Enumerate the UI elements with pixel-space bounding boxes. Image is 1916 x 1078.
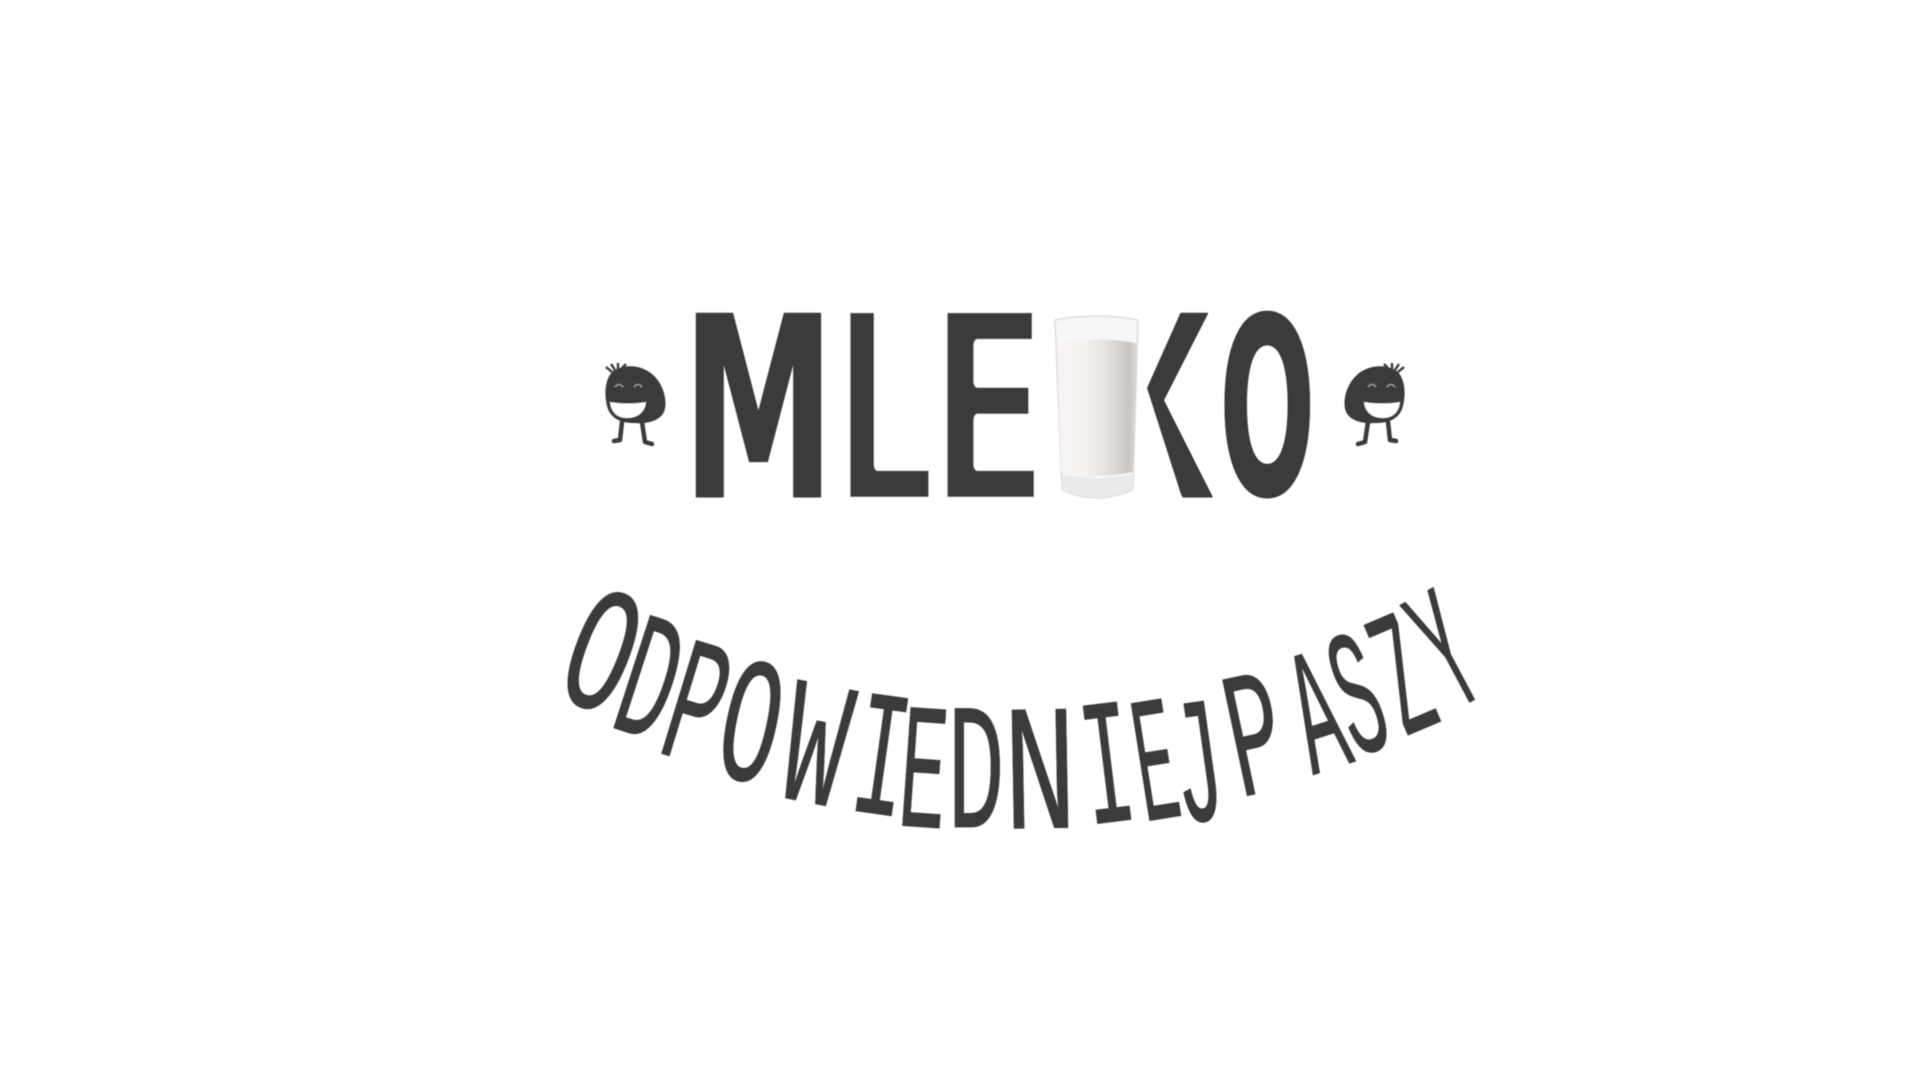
- title word: MLEKO: M: [682, 264, 835, 557]
- curved tagline: ODPOWIEDNIEJ PASZY: D: [590, 584, 704, 794]
- curved tagline: ODPOWIEDNIEJ PASZY: N: [1002, 679, 1079, 884]
- curved tagline: ODPOWIEDNIEJ PASZY: E: [892, 675, 954, 883]
- curved tagline: ODPOWIEDNIEJ PASZY: I: [839, 662, 921, 871]
- title word: MLEKO: O: [1219, 267, 1316, 554]
- curved tagline: ODPOWIEDNIEJ PASZY: E: [1121, 668, 1193, 875]
- title word: MLEKO: [695, 310, 1311, 500]
- curved tagline: ODPOWIEDNIEJ PASZY: W: [764, 651, 865, 862]
- curved tagline: ODPOWIEDNIEJ PASZY: J: [1160, 669, 1238, 879]
- title word: MLEKO: L: [831, 254, 937, 567]
- title word: MLEKO: E: [926, 254, 1051, 567]
- title word: MLEKO: K: [1111, 263, 1213, 556]
- logo: milk title with mascots and curved tagline: [566, 310, 1476, 830]
- curved tagline: ODPOWIEDNIEJ PASZY: S: [1309, 602, 1413, 809]
- curved tagline: ODPOWIEDNIEJ PASZY: [532, 554, 1516, 884]
- curved tagline: ODPOWIEDNIEJ PASZY: P: [1209, 640, 1304, 851]
- curved tagline: ODPOWIEDNIEJ PASZY: P: [639, 609, 750, 819]
- icon: left mascot: [605, 363, 666, 444]
- icon: right mascot: [1344, 363, 1405, 444]
- curved tagline: ODPOWIEDNIEJ PASZY: A: [1267, 620, 1373, 827]
- icon: glass of milk replacing the stem of the K: [1054, 312, 1142, 506]
- curved tagline: ODPOWIEDNIEJ PASZY: D: [947, 678, 1005, 882]
- curved tagline: ODPOWIEDNIEJ PASZY: I: [1071, 671, 1146, 879]
- curved tagline: ODPOWIEDNIEJ PASZY: Y: [1384, 559, 1516, 758]
- curved tagline: ODPOWIEDNIEJ PASZY: Z: [1347, 583, 1465, 786]
- curved tagline: ODPOWIEDNIEJ PASZY: O: [699, 627, 800, 839]
- curved tagline: ODPOWIEDNIEJ PASZY: O: [532, 554, 666, 769]
